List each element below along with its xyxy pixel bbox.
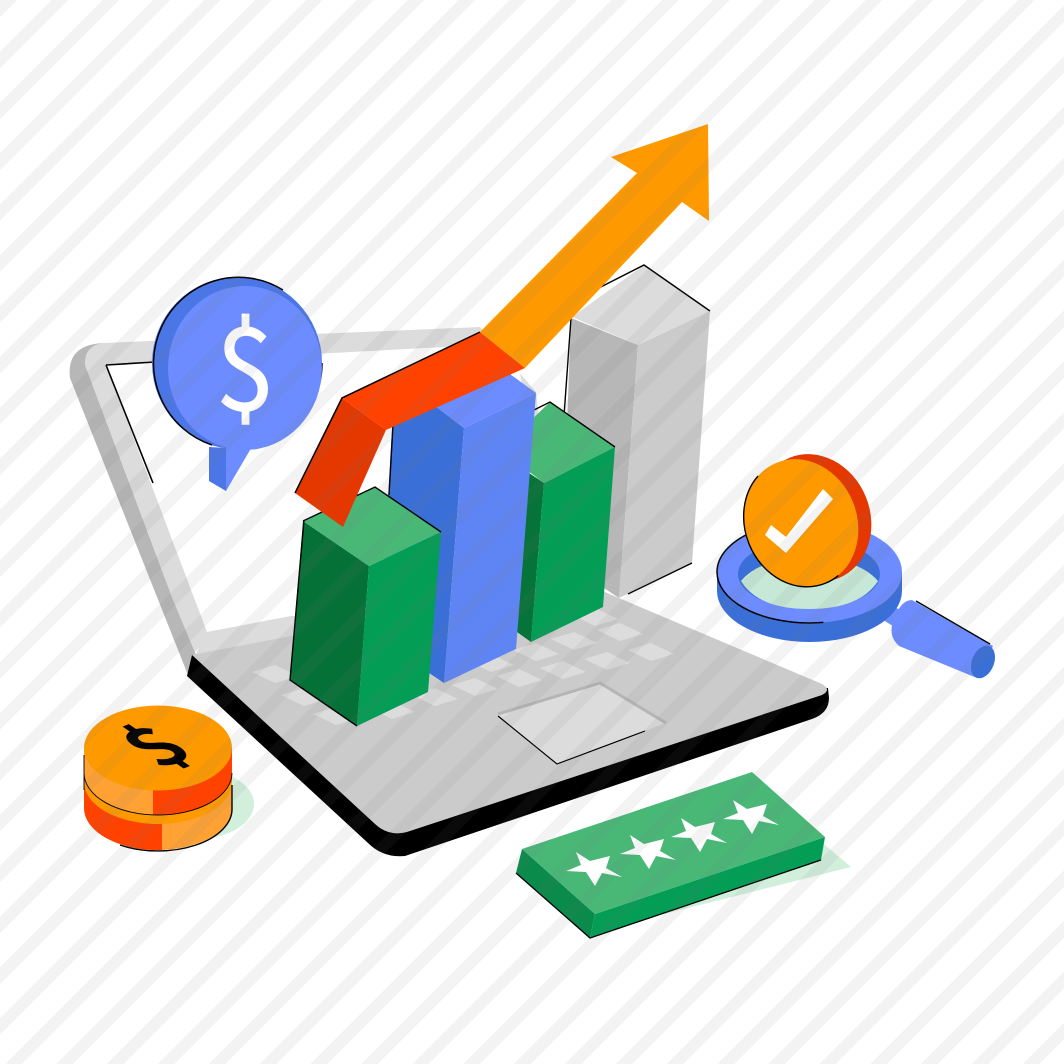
upper coin — [84, 706, 232, 815]
lower coin — [84, 760, 232, 851]
dollar sign: $ — [215, 276, 275, 443]
coin stack — [84, 704, 254, 851]
card shadow — [640, 845, 851, 920]
rating card with stars — [516, 772, 851, 938]
star 1 — [566, 852, 622, 886]
keyboard keys — [252, 608, 674, 725]
star 3 — [671, 818, 727, 852]
lens glass — [741, 558, 878, 609]
bar chart — [290, 265, 710, 726]
coin shadow — [138, 769, 254, 839]
laptop screen frame — [70, 327, 560, 675]
speech bubble with dollar sign — [152, 276, 322, 491]
laptop — [70, 327, 829, 856]
coin dollar sign: $ — [87, 704, 216, 782]
laptop keyboard deck — [192, 590, 827, 833]
handle — [878, 600, 1000, 682]
magnifying glass — [717, 521, 1000, 682]
green back bar — [500, 402, 615, 642]
star 4 — [723, 800, 779, 834]
green front bar — [290, 487, 441, 726]
check badge — [725, 437, 890, 604]
star 2 — [620, 835, 676, 869]
grey bar — [562, 265, 710, 598]
trackpad — [498, 683, 666, 764]
laptop base side — [187, 655, 829, 856]
lens ring — [717, 572, 902, 642]
blue bar — [380, 345, 536, 683]
check mark — [765, 489, 833, 553]
growth arrow — [295, 124, 709, 527]
